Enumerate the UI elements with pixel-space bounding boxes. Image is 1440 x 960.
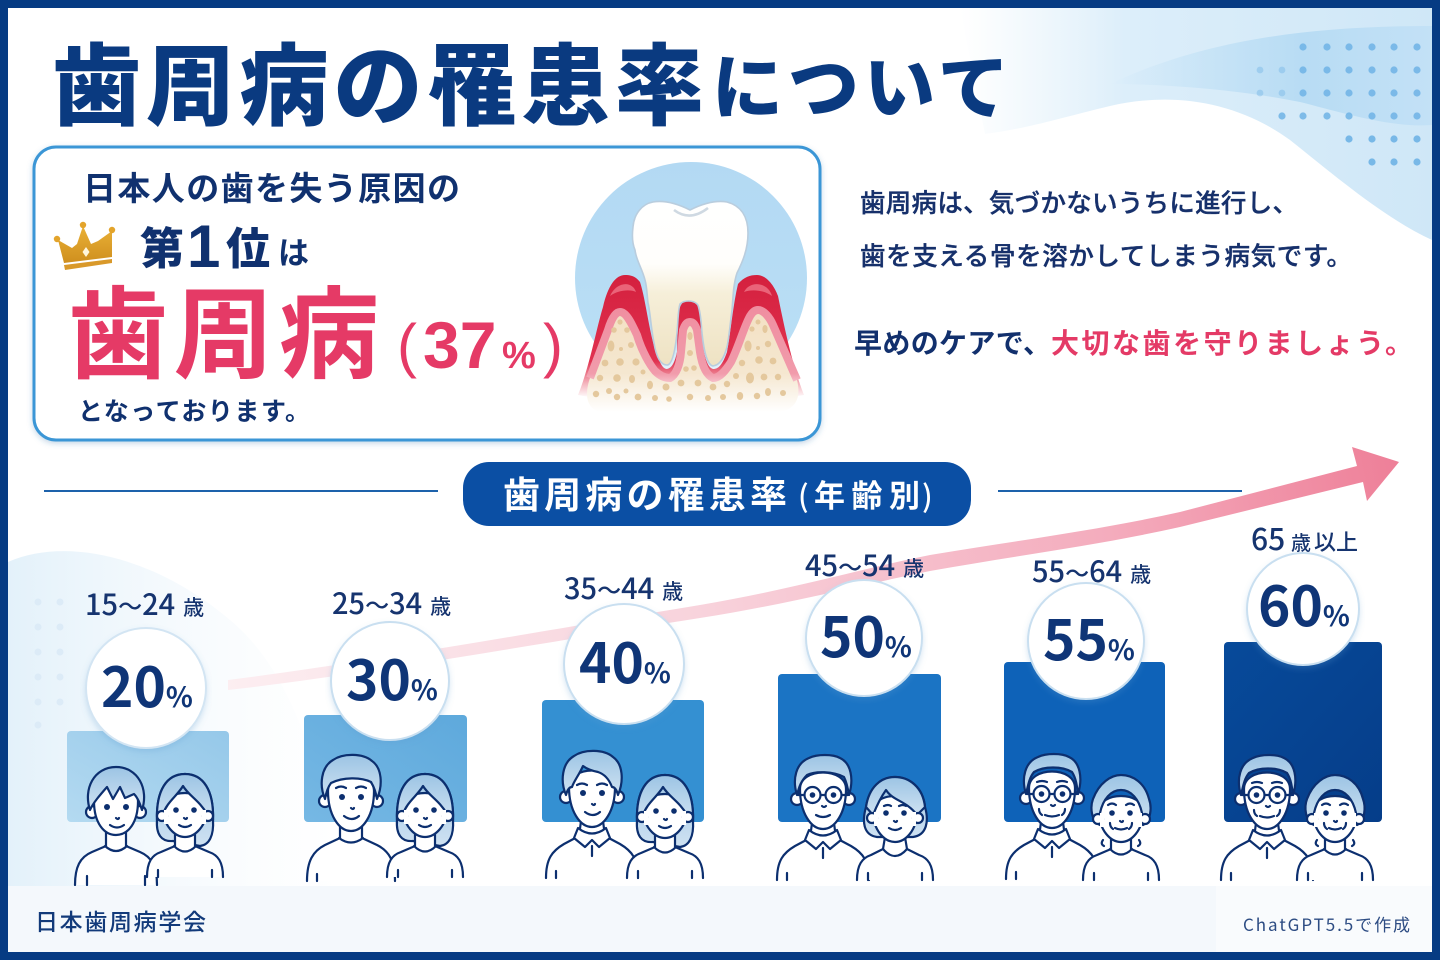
bar: 55% [1004,662,1165,822]
label: age 25-34: 25～34 歳 [332,581,451,623]
value circle: 60% [1247,553,1359,665]
section heading: prevalence by age: 年齢別 [814,471,920,516]
bar: 50% [778,674,941,822]
text: rank first [140,213,309,280]
bone texture dots [593,319,786,402]
value circle: 60%: 60% [1258,562,1350,642]
value circle: 50%: 50% [820,593,912,673]
text: periodontal disease 37% [68,280,563,392]
background wave: bottom left [8,551,340,886]
illustration: tooth with inflamed gums [575,162,807,412]
value circle: 55% [1028,583,1144,699]
text: periodontal disease 37%: % [502,335,536,377]
group: ages 15-24, 20% [67,582,229,885]
label: age 45-54: 45～54 歳 [805,543,924,585]
group: ages 25-34, 30% [304,581,467,881]
text block: care message: 早めのケアで、 [854,328,1051,359]
value circle: 40%: 40% [579,619,671,699]
text: rank first: 第 [140,225,184,274]
group: ages 55-64, 55% [1004,549,1165,880]
people: young couple [75,767,223,885]
arrow: rising trend [228,447,1399,690]
tooth [632,201,748,366]
text block: description [860,190,1352,271]
bar chart: prevalence by age group [67,515,1382,885]
label: age 55-64: 55～64 歳 [1032,549,1151,591]
text: rank first: は [278,236,309,271]
bar: 40% [542,700,704,822]
text: periodontal disease 37%: ( [397,312,417,379]
value circle: 40% [564,604,684,724]
group: ages 35-44, 40% [542,566,704,878]
bar: 20% [67,731,229,822]
text: periodontal disease 37%: 歯周病 [68,280,379,392]
label: age 35-44: 35～44 歳 [564,566,683,608]
label: age 15-24: 15～24 歳 [85,582,204,624]
group: ages 65+, 60% [1221,515,1382,880]
source: Japanese Society of Periodontology: 日本歯周病学会 [35,903,206,937]
value circle: 55%: 55% [1043,596,1135,676]
people: older couple [1006,754,1159,880]
bar: 30% [304,715,467,822]
value circle: 30% [331,622,449,740]
text block: care message: 大切な歯を守りましょう。 [1051,328,1413,359]
label: age 65 and over: 65 [1251,515,1285,559]
bar: 60% [1224,642,1382,822]
panel: top cause callout card [34,147,820,440]
text: closing phrase: となっております。 [78,392,310,428]
text block: description: 歯周病は、気づかないうちに進行し、 [860,190,1298,218]
value circle: 50% [806,580,922,696]
value circle: 20%: 20% [101,643,193,723]
section heading: prevalence by age: 歯周病の罹患率 [503,465,787,519]
label: age 65 and over [1251,515,1358,559]
text block: care message [854,328,1413,359]
title: 歯周病の罹患率 [52,37,704,137]
value circle: 30%: 30% [346,636,438,716]
people: middle-aged couple [546,751,703,878]
icon: gold crown [54,222,115,270]
section heading: prevalence by age [44,462,1242,526]
text block: description: 歯を支える骨を溶かしてしまう病気です。 [860,243,1352,271]
section heading: prevalence by age: ) [922,472,933,516]
people: couple in their fifties [777,755,933,880]
title [52,37,1009,137]
label: age 65 and over: 以上 [1314,525,1358,557]
group: ages 45-54, 50% [777,543,941,880]
footer band [8,886,1432,952]
section heading: prevalence by age: ( [798,472,809,516]
people: senior couple [1221,755,1373,880]
text: periodontal disease 37%: ) [543,312,563,379]
text: periodontal disease 37%: 37 [423,308,496,382]
label: age 65 and over: 歳 [1291,527,1311,556]
text: cause intro: 日本人の歯を失う原因の [83,162,460,210]
people: adult couple [307,755,463,881]
dot pattern: top right [1257,43,1421,166]
dot pattern: bottom left [34,598,64,728]
credit: ChatGPT: ChatGPT5.5で作成 [1243,911,1410,936]
text: rank first: 1 [187,213,220,280]
text: rank first: 位 [226,225,270,274]
title: について [712,50,1009,129]
background wave: top right [960,8,1432,240]
value circle: 20% [86,628,206,748]
